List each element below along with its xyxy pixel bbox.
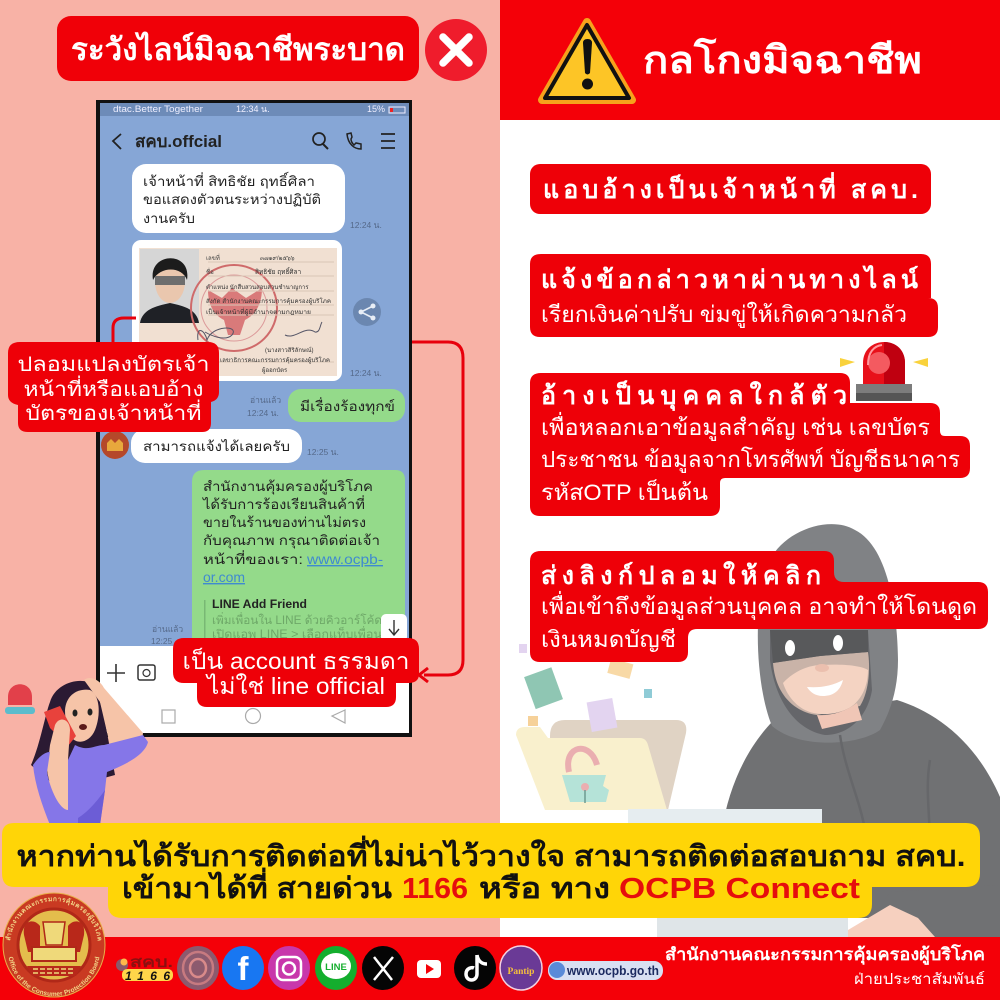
arrow: connector from header to ordinary account callout <box>412 342 463 682</box>
chat header <box>113 133 395 151</box>
heading: scam tricks: กลโกงมิจฉาชีพ <box>643 37 922 82</box>
website pill: www.ocpb.go.th <box>566 964 659 978</box>
illustration: laptop and hacker hands behind banner <box>500 809 1000 937</box>
tactic: impersonating officers <box>530 164 931 214</box>
heading: beware of scam LINE <box>57 16 419 81</box>
icon: Instagram <box>268 946 310 990</box>
chat bubble: complaint reply: อ่านแล้ว <box>250 395 281 405</box>
chat bubble: you can report: 12:25 น. <box>307 447 339 457</box>
chat image: fake officer ID card: เป็นเจ้าหน้าที่ผู้มีอำนาจตามกฎหมาย <box>206 307 311 316</box>
icon: Pantip <box>500 946 542 990</box>
icon: YouTube <box>417 960 441 978</box>
callout: contact banner <box>2 823 980 918</box>
callout: forged officer card: หน้าที่หรือแอบอ้าง <box>24 375 203 401</box>
panel: footer red band <box>0 937 1000 1000</box>
icon: red siren <box>840 342 928 401</box>
footer: department: ฝ่ายประชาสัมพันธ์ <box>854 971 985 988</box>
tactic: sending fake links: เงินหมดบัญชี <box>541 627 676 652</box>
tactic: impersonating officers: แอบอ้างเป็นเจ้าหน้าที่ สคบ. <box>543 172 918 204</box>
callout: forged officer card: บัตรของเจ้าหน้าที่ <box>26 399 202 425</box>
icon: TikTok <box>454 946 496 990</box>
icon: fake OCPB avatar <box>101 431 129 459</box>
icon: X <box>362 946 404 990</box>
chat bubble: phishing message with link: หน้าที่ของเรา: <box>203 550 303 567</box>
chat bubble: officer introduction: งานครับ <box>143 211 195 226</box>
chat image: fake officer ID card: ตำแหน่ง นักสืบสวนสอบสวนชำนาญการ <box>206 283 309 291</box>
panel: phone screenshot of fake LINE chat <box>96 100 412 737</box>
chat image: fake officer ID card: เลขาธิการคณะกรรมการคุ้มครองผู้บริโภค <box>220 356 330 364</box>
chat image: fake officer ID card: สังกัด สำนักงานคณะกรรมการคุ้มครองผู้บริโภค <box>206 297 331 305</box>
website pill <box>548 961 663 980</box>
chat bubble: phishing message with link: ได้รับการร้องเรียนสินค้าที่ <box>202 495 365 512</box>
callout: contact banner: หรือ ทาง <box>479 873 610 905</box>
icon: LINE: LINE <box>325 962 347 973</box>
chat image: fake officer ID card: เลขที่ <box>206 254 220 262</box>
icon: warning triangle <box>542 22 632 100</box>
logo: OCPB seal: สำนักงานคณะกรรมการคุ้มครองผู้บริโภค <box>5 897 102 941</box>
social icons row <box>177 946 542 990</box>
tactic: posing as someone close: เพื่อหลอกเอาข้อมูลสำคัญ เช่น เลขบัตร <box>541 411 930 441</box>
callout: contact banner: หากท่านได้รับการติดต่อที่ไม่น่าไว้วางใจ สามารถติดต่อสอบถาม สคบ. <box>16 835 966 873</box>
icon: Pantip: Pantip <box>508 967 534 977</box>
icon: share button <box>353 298 381 326</box>
panel: right red header band <box>500 0 1000 120</box>
icon: Facebook: f <box>238 950 250 987</box>
tactic: posing as someone close: ประชาชน ข้อมูลจากโทรศัพท์ บัญชีธนาคาร <box>541 446 960 473</box>
chat bubble: you can report: สามารถแจ้งได้เลยครับ <box>143 439 290 454</box>
tactic: accusing via LINE: แจ้งข้อกล่าวหาผ่านทางไลน์ <box>541 264 918 294</box>
logo: OCPB seal <box>2 892 106 998</box>
logo: OCPB 1166 hotline: สคบ. <box>130 954 173 971</box>
chat image: fake officer ID card: สิทธิชัย ฤทธิ์ศิลา <box>255 267 302 276</box>
chat bubble: officer introduction: ขอแสดงตัวตนระหว่างปฏิบัติ <box>143 192 321 207</box>
chat bubble: phishing message with link: www.ocpb- <box>306 551 383 567</box>
chat bubble: complaint reply: มีเรื่องร้องทุกข์ <box>300 397 395 415</box>
arrow: connector from callout to ID card <box>113 318 136 345</box>
callout: contact banner: 1166 <box>402 873 468 905</box>
chat bubble: phishing message with link: เปิดแอพ LINE > เลือกแท็บเพื่อน <box>212 626 382 641</box>
chat bubble: phishing message with link: or.com <box>203 569 245 585</box>
status bar: 15% <box>367 104 385 114</box>
chat image: fake officer ID card: ผู้ออกบัตร <box>262 367 288 374</box>
chat bubble: officer introduction: 12:24 น. <box>350 220 382 230</box>
tactic: sending fake links: ส่งลิงก์ปลอมให้คลิก <box>541 560 821 590</box>
chat bubble: phishing message with link: เพิ่มเพื่อนใน LINE ด้วยคิวอาร์โค้ด <box>212 612 382 627</box>
tactic: sending fake links: เพื่อเข้าถึงข้อมูลส่วนบุคคล อาจทำให้โดนดูด <box>541 590 977 620</box>
illustration: open folder with broken lock <box>516 644 686 810</box>
icon: OCPB connect <box>177 946 219 990</box>
chat bubble: phishing message with link: กับคุณภาพ กรุณาติดต่อเจ้า <box>203 533 380 549</box>
heading: beware of scam LINE: ระวังไลน์มิจฉาชีพระบาด <box>71 31 405 67</box>
illustration: worried woman on phone <box>5 678 148 825</box>
chat bubble: phishing message with link: อ่านแล้ว <box>152 624 183 634</box>
chat image: fake officer ID card: ๓๗๑๙/๒๕๖๖ <box>260 255 295 262</box>
tactic: accusing via LINE: เรียกเงินค่าปรับ ข่มขู่ให้เกิดความกลัว <box>541 302 907 328</box>
illustration: hacker in hood <box>722 524 1000 937</box>
panel: left pink background <box>0 0 500 1000</box>
logo: OCPB 1166 hotline: 1166 <box>125 969 170 983</box>
chat bubble: complaint reply <box>247 389 405 422</box>
tactic: accusing via LINE <box>530 254 938 337</box>
tactic: posing as someone close: รหัสOTP เป็นต้น <box>541 478 708 505</box>
chat image: fake officer ID card: (นางสาวสิริลักษณ์) <box>265 346 314 354</box>
icon: Facebook <box>222 946 264 990</box>
tactic: posing as someone close: อ้างเป็นบุคคลใกล้ตัว <box>541 380 847 412</box>
chat bubble: phishing message with link <box>151 470 405 646</box>
chat input and navigation bar <box>100 646 409 733</box>
chat bubble: phishing message with link: LINE Add Friend <box>212 597 307 611</box>
chat bubble: officer introduction: เจ้าหน้าที่ สิทธิชัย ฤทธิ์ศิลา <box>143 171 315 189</box>
logo: OCPB 1166 hotline <box>116 954 173 983</box>
chat header: สคบ.offcial <box>135 133 222 151</box>
tactic: sending fake links <box>530 551 988 662</box>
callout: ordinary account not official: เป็น account ธรรมดา <box>182 646 410 674</box>
status bar <box>100 103 409 116</box>
icon: red cross circle <box>425 19 487 81</box>
chat bubble: phishing message with link: 12:25 <box>151 636 173 646</box>
logo: OCPB seal: Office of the Consumer Protection Board <box>8 956 100 996</box>
chat image: fake officer ID card <box>132 240 382 381</box>
chat bubble: officer introduction <box>132 164 382 233</box>
status bar: dtac.Better Together <box>113 104 203 114</box>
chat bubble: you can report <box>131 429 339 463</box>
footer: agency name: สำนักงานคณะกรรมการคุ้มครองผู้บริโภค <box>665 944 985 966</box>
callout: forged officer card <box>8 342 219 432</box>
callout: ordinary account not official <box>173 638 419 707</box>
chat bubble: phishing message with link: สำนักงานคุ้มครองผู้บริโภค <box>203 478 373 495</box>
icon: LINE <box>315 946 357 990</box>
chat bubble: phishing message with link: ขายในร้านของท่านไม่ตรง <box>203 514 366 530</box>
chat bubble: complaint reply: 12:24 น. <box>247 408 279 418</box>
callout: contact banner: เข้ามาได้ที่ สายด่วน <box>122 867 392 905</box>
chat image: fake officer ID card: 12:24 น. <box>350 368 382 378</box>
chat image: fake officer ID card: ชื่อ <box>206 268 214 276</box>
callout: contact banner: OCPB Connect <box>619 873 860 905</box>
icon: scroll down button <box>381 614 407 642</box>
callout: ordinary account not official: ไม่ใช่ line official <box>205 673 385 699</box>
status bar: 12:34 น. <box>236 104 270 114</box>
callout: forged officer card: ปลอมแปลงบัตรเจ้า <box>18 354 210 376</box>
tactic: posing as someone close <box>530 373 970 516</box>
